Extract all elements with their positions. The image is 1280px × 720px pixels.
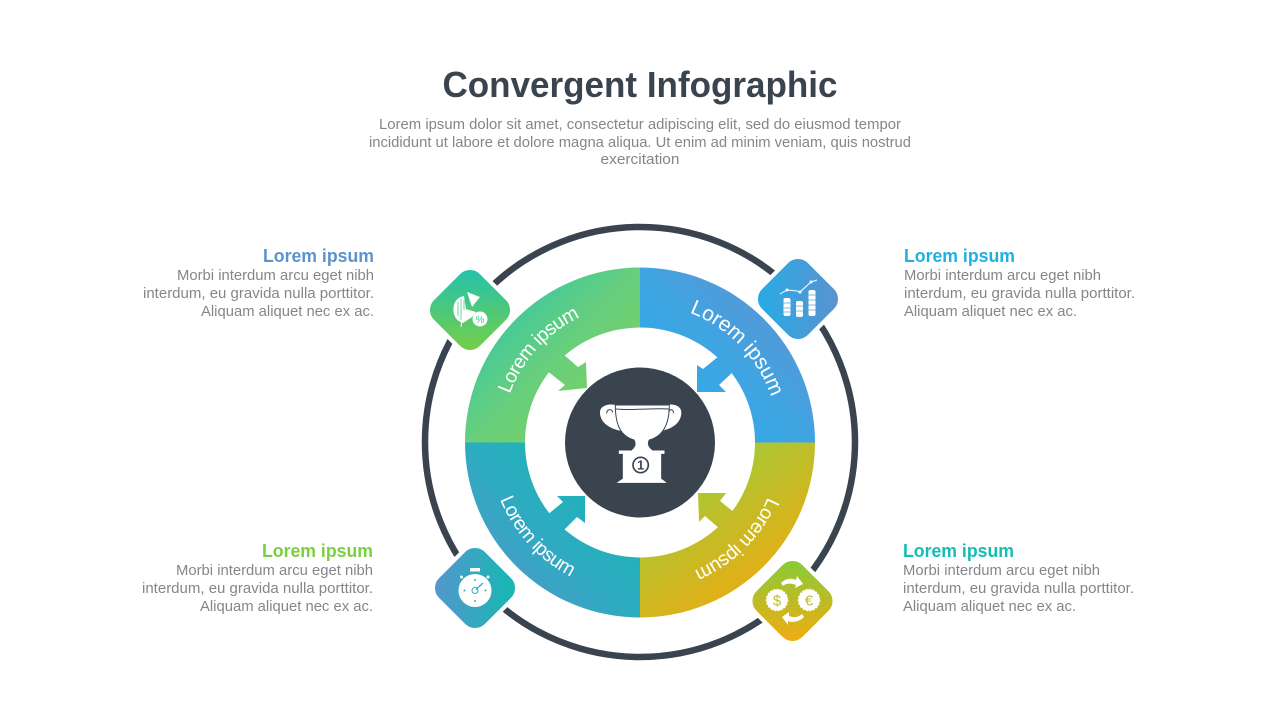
icon tile: currency exchange: $ — [773, 592, 782, 610]
title: Convergent Infographic — [442, 64, 838, 105]
centre circle — [565, 368, 715, 518]
outer ring — [425, 227, 855, 657]
subtitle text block — [369, 117, 911, 168]
text block: top right — [904, 246, 1135, 320]
subtitle text block: Lorem ipsum dolor sit amet, consectetur adipiscing elit, sed do eiusmod tempor — [379, 117, 901, 133]
icon tile: currency exchange — [744, 552, 841, 650]
text block: top left: Morbi interdum arcu eget nibh — [177, 268, 374, 284]
text block: bottom right: interdum, eu gravida nulla porttitor. — [903, 581, 1134, 597]
text block: bottom left: Aliquam aliquet nec ex ac. — [200, 599, 373, 615]
segment: bottom right with arrow — [640, 442, 815, 618]
text block: bottom left: Lorem ipsum — [262, 541, 373, 561]
text block: top right: interdum, eu gravida nulla porttitor. — [904, 286, 1135, 302]
segment: bottom left with arrow — [465, 442, 640, 618]
text block: bottom right: Aliquam aliquet nec ex ac. — [903, 599, 1076, 615]
segment: top left with arrow: Lorem ipsum — [498, 309, 579, 392]
text block: top right: Lorem ipsum — [904, 246, 1015, 266]
icon tile: pie chart: % — [476, 315, 485, 326]
text block: top right: Aliquam aliquet nec ex ac. — [904, 304, 1077, 320]
subtitle text block: incididunt ut labore et dolore magna aliqua. Ut enim ad minim veniam, quis nostrud — [369, 135, 911, 151]
segment: top right with arrow: Lorem ipsum — [691, 300, 781, 396]
text block: bottom right: Morbi interdum arcu eget nibh — [903, 563, 1100, 579]
icon tile: stopwatch — [426, 539, 524, 637]
icon: trophy: 1 — [637, 459, 644, 473]
text block: bottom left — [142, 541, 373, 615]
icon tile: pie chart — [421, 261, 519, 359]
text block: bottom right: Lorem ipsum — [903, 541, 1014, 561]
icon: trophy — [600, 405, 681, 483]
subtitle text block: exercitation — [600, 152, 680, 168]
text block: top left: Aliquam aliquet nec ex ac. — [201, 304, 374, 320]
text block: bottom right — [903, 541, 1134, 615]
segment: bottom left with arrow: Lorem ipsum — [500, 495, 574, 576]
text block: top left: interdum, eu gravida nulla porttitor. — [143, 286, 374, 302]
icon tile: growth bars — [749, 250, 847, 348]
text block: top right: Morbi interdum arcu eget nibh — [904, 268, 1101, 284]
text block: top left: Lorem ipsum — [263, 246, 374, 266]
text block: bottom left: interdum, eu gravida nulla porttitor. — [142, 581, 373, 597]
text block: bottom left: Morbi interdum arcu eget nibh — [176, 563, 373, 579]
text block: top left — [143, 246, 374, 320]
segment: top right with arrow — [640, 268, 815, 442]
segment: bottom right with arrow: Lorem ipsum — [695, 498, 780, 579]
icon tile: currency exchange: € — [805, 592, 814, 610]
segment: top left with arrow — [465, 268, 640, 442]
